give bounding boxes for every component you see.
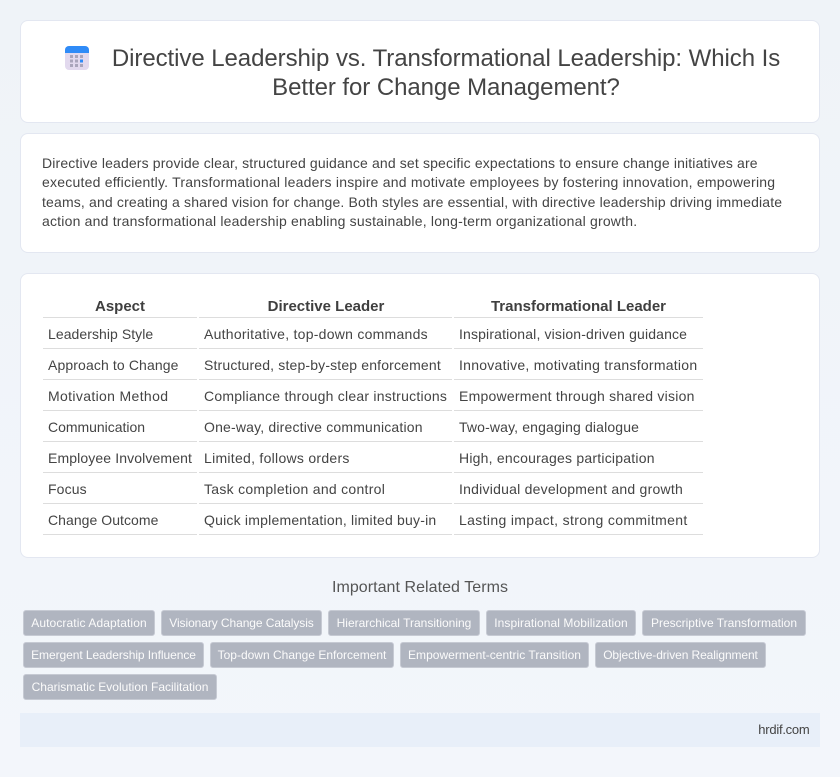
summary paragraph: teams, and creating a shared vision for change. Both styles are essential, with directive leadership driving immediate: [42, 194, 782, 210]
comparison table: Approach to Change: [48, 357, 179, 373]
comparison table: Inspirational, vision-driven guidance: [459, 326, 687, 342]
related term tags: Visionary Change Catalysis: [169, 616, 314, 630]
related term tags: Prescriptive Transformation: [651, 616, 797, 630]
comparison table: High, encourages participation: [459, 450, 655, 466]
comparison table: Motivation Method: [48, 388, 168, 404]
related term tags: Objective-driven Realignment: [603, 648, 758, 662]
heading: related terms: Important Related Terms: [332, 579, 508, 596]
comparison table: Focus: [48, 481, 87, 497]
comparison table: Leadership Style: [48, 326, 153, 342]
comparison table: Directive Leader: [268, 298, 384, 315]
comparison table: Empowerment through shared vision: [459, 388, 695, 404]
icon: calendar: [65, 46, 89, 70]
footer bar: [20, 713, 820, 747]
comparison table: Communication: [48, 419, 145, 435]
comparison table: Authoritative, top-down commands: [204, 326, 428, 342]
footer source text: hrdif.com: [758, 722, 810, 737]
title: [112, 45, 780, 101]
comparison table: Lasting impact, strong commitment: [459, 512, 688, 528]
panel: comparison table: [20, 273, 820, 558]
related term tags: Inspirational Mobilization: [494, 616, 628, 630]
title: Directive Leadership vs. Transformational Leadership: Which Is: [112, 45, 780, 72]
comparison table: Limited, follows orders: [204, 450, 350, 466]
panel: summary text: [20, 133, 820, 253]
related term tags: Charismatic Evolution Facilitation: [32, 680, 208, 694]
comparison table: Transformational Leader: [491, 298, 666, 315]
related term tags: Top-down Change Enforcement: [218, 648, 386, 662]
related term tags: [23, 610, 806, 700]
related term tags: Hierarchical Transitioning: [337, 616, 471, 630]
summary paragraph: [42, 155, 782, 229]
comparison table: Task completion and control: [204, 481, 385, 497]
comparison table: Aspect: [95, 298, 145, 315]
related term tags: Empowerment-centric Transition: [408, 648, 581, 662]
comparison table: Employee Involvement: [48, 450, 192, 466]
summary paragraph: Directive leaders provide clear, structured guidance and set specific expectations to ensure change initiatives are: [42, 155, 758, 171]
comparison table: Individual development and growth: [459, 481, 683, 497]
comparison table: Innovative, motivating transformation: [459, 357, 697, 373]
comparison table: [43, 298, 703, 535]
comparison table: Compliance through clear instructions: [204, 388, 447, 404]
comparison table: Quick implementation, limited buy-in: [204, 512, 436, 528]
panel: header: [20, 20, 820, 123]
summary paragraph: executed efficiently. Transformational leaders inspire and motivate employees by fostering innovation, empowering: [42, 174, 775, 190]
comparison table: Two-way, engaging dialogue: [459, 419, 639, 435]
comparison table: One-way, directive communication: [204, 419, 423, 435]
comparison table: Structured, step-by-step enforcement: [204, 357, 441, 373]
related term tags: Autocratic Adaptation: [31, 616, 147, 630]
summary paragraph: action and transformational leadership enabling sustainable, long-term organizational growth.: [42, 213, 637, 229]
comparison table: Change Outcome: [48, 512, 158, 528]
related term tags: Emergent Leadership Influence: [31, 648, 196, 662]
title: Better for Change Management?: [272, 74, 620, 101]
